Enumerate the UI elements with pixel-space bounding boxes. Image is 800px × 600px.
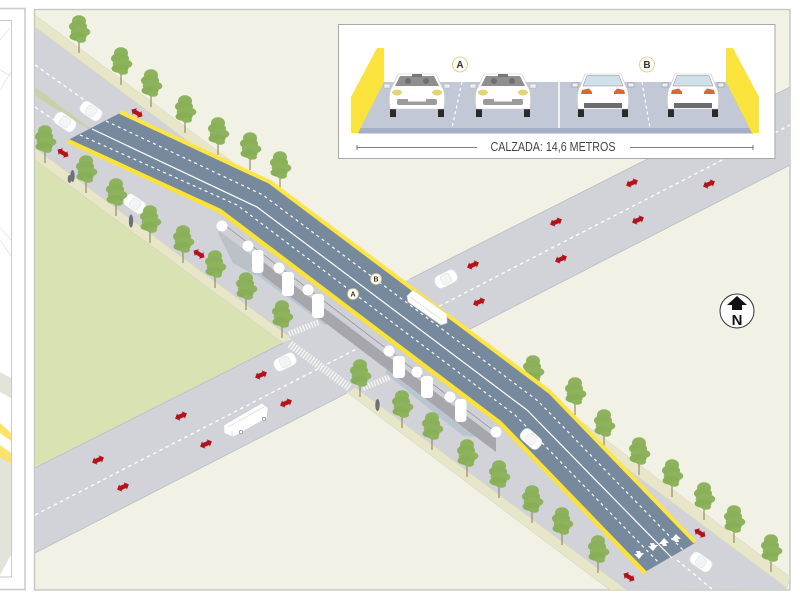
icon: north arrow: N	[732, 312, 742, 329]
trees in front of the overpass	[35, 125, 609, 573]
road: east-west cross street	[35, 87, 790, 553]
pedestrians	[68, 170, 380, 411]
width dimension line	[357, 145, 753, 150]
grass field	[35, 160, 283, 468]
label: lane B: B	[373, 276, 379, 284]
sidewalk: south side east	[348, 387, 627, 590]
inset label A	[452, 57, 468, 72]
median strip	[35, 87, 90, 129]
lane direction arrows on deck	[634, 534, 681, 559]
sidewalk: south side west	[35, 148, 290, 343]
label: lane A	[348, 288, 358, 300]
width caption: CALZADA: 14,6 METROS	[490, 139, 616, 154]
vehicles: cars	[52, 99, 714, 574]
cars rear view: lane B	[572, 74, 724, 117]
left yellow wall	[351, 48, 384, 133]
crosswalks	[289, 322, 390, 388]
traffic direction arrows	[55, 106, 717, 584]
left neighbouring panel	[0, 8, 25, 590]
inset label B: B	[643, 60, 651, 71]
inset label A: A	[456, 60, 464, 71]
road surface	[358, 82, 753, 128]
vehicle: bus on cross street	[224, 403, 268, 437]
road edge	[358, 128, 753, 134]
icon: north arrow	[720, 294, 754, 329]
cars front view: lane A	[384, 74, 536, 117]
right yellow wall	[726, 48, 759, 133]
label: lane A: A	[350, 292, 356, 298]
label: lane B	[370, 274, 382, 284]
vehicle: bus on overpass	[407, 290, 447, 325]
overpass deck	[68, 112, 695, 573]
lane markings	[452, 82, 650, 128]
panel: road cross-section inset	[338, 24, 775, 158]
inset label B	[640, 57, 654, 72]
overpass supports: shadow, bases, beams, pillars	[216, 212, 502, 452]
